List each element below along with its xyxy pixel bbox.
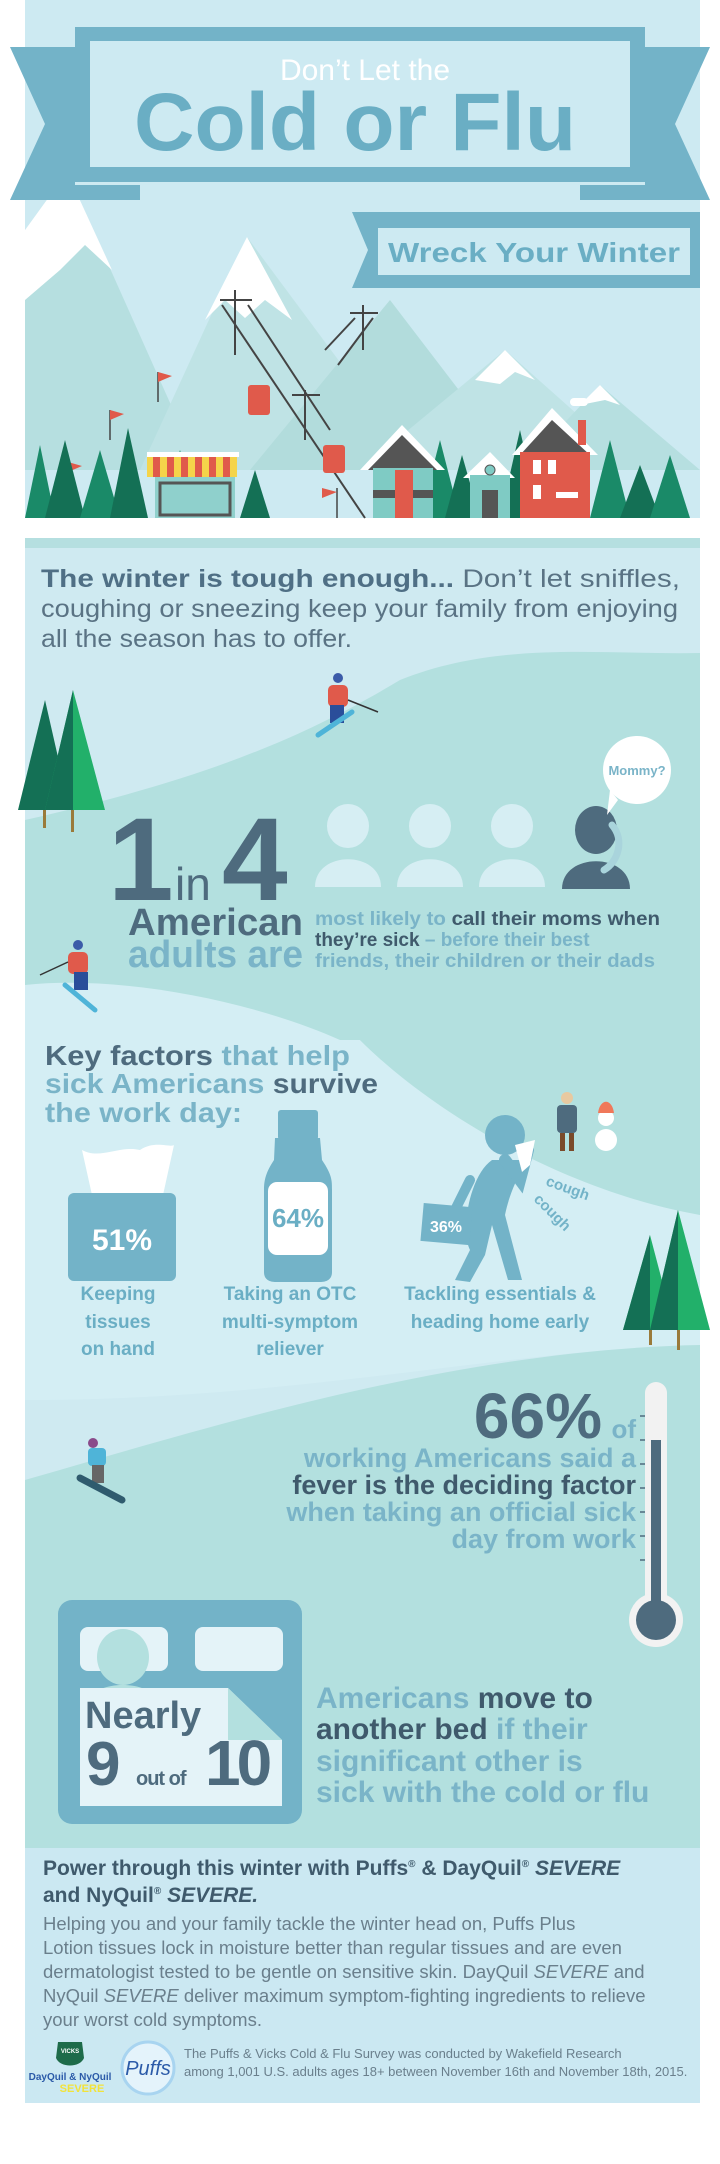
heading: Cold or Flu: Cold or Flu bbox=[134, 77, 576, 168]
icon: tissue box 51% bbox=[68, 1145, 176, 1281]
title banner bbox=[10, 27, 710, 200]
labels: key factors: reliever bbox=[256, 1339, 324, 1360]
icon: bed with 9 out of 10: Nearly bbox=[85, 1695, 201, 1737]
heading: power through: Power through this winter with Puffs bbox=[43, 1857, 408, 1880]
text: move to another bed: another bed if their bbox=[316, 1713, 588, 1746]
stat: 1 in 4 bbox=[108, 794, 303, 976]
flags bbox=[68, 372, 337, 518]
labels: key factors: Taking an OTC bbox=[224, 1284, 357, 1305]
text: moms: they’re sick – before their best bbox=[315, 930, 590, 951]
heading: power through bbox=[43, 1857, 621, 1907]
heading: power through: SEVERE. bbox=[161, 1884, 258, 1907]
icon: tissue box 51%: 51% bbox=[92, 1224, 152, 1257]
intro text bbox=[41, 565, 680, 653]
stat: 1 in 4: adults are bbox=[128, 934, 303, 976]
panel: header scene bbox=[25, 0, 700, 518]
text: footnote: among 1,001 U.S. adults ages 18+ between November 16th and November 18th, 2015. bbox=[184, 2064, 687, 2079]
logo: Vicks DayQuil NyQuil: SEVERE bbox=[60, 2083, 104, 2095]
icon: people bbox=[315, 804, 630, 889]
stat: 1 in 4: 4 bbox=[222, 794, 288, 926]
labels: key factors: on hand bbox=[81, 1339, 155, 1360]
stat: 66% fever: working Americans said a bbox=[303, 1443, 637, 1473]
icon: skier left bbox=[40, 940, 95, 1010]
intro text: coughing or sneezing keep your family from enjoying bbox=[41, 595, 678, 623]
stat: 66% fever: of bbox=[611, 1414, 636, 1444]
heading: power through: and NyQuil bbox=[43, 1884, 154, 1907]
stat: 1 in 4: in bbox=[175, 858, 211, 910]
stat: 66% fever: fever is the deciding factor bbox=[292, 1470, 636, 1500]
houses bbox=[360, 398, 598, 518]
text: moms: most likely to call their moms when bbox=[315, 909, 660, 930]
intro text: The winter is tough enough... Don’t let sniffles, bbox=[41, 565, 680, 593]
labels: key factors: heading home early bbox=[411, 1312, 590, 1333]
text: moms bbox=[315, 909, 660, 972]
icon: sick walking person 36% bbox=[420, 1115, 592, 1282]
heading: power through: ® bbox=[522, 1859, 530, 1870]
logo: Vicks DayQuil NyQuil bbox=[29, 2042, 112, 2095]
heading: key factors: the work day: bbox=[45, 1097, 242, 1128]
logo: Vicks DayQuil NyQuil: DayQuil & NyQuil bbox=[29, 2072, 112, 2083]
panel: stats section background bbox=[25, 538, 700, 1848]
heading: key factors: sick Americans survive bbox=[45, 1068, 378, 1099]
stat: 66% fever: 66% bbox=[474, 1380, 602, 1452]
heading: Don't Let the: Don’t Let the bbox=[280, 54, 450, 87]
text: body paragraph: your worst cold symptoms. bbox=[43, 2009, 262, 2030]
labels: key factors: Tackling essentials & bbox=[404, 1284, 596, 1305]
stat: 1 in 4: 1 bbox=[108, 794, 174, 926]
stat: 66% fever bbox=[285, 1380, 637, 1554]
text: footnote bbox=[184, 2046, 687, 2079]
heading: power through: SEVERE bbox=[529, 1857, 621, 1880]
labels: key factors: Keeping bbox=[81, 1284, 155, 1305]
labels: key factors bbox=[81, 1284, 596, 1360]
heading: power through: ® bbox=[154, 1886, 162, 1897]
logo: Vicks DayQuil NyQuil: VICKS bbox=[61, 2049, 79, 2055]
icon: bottle 64%: 64% bbox=[272, 1203, 324, 1233]
stat: 66% fever: day from work bbox=[451, 1524, 637, 1554]
heading: key factors: Key factors that help bbox=[45, 1040, 350, 1071]
text: body paragraph: Lotion tissues lock in moisture better than regular tissues and are even bbox=[43, 1937, 622, 1958]
callout: Mommy? bbox=[603, 736, 671, 815]
text: body paragraph: Helping you and your family tackle the winter head on, Puffs Plus bbox=[43, 1913, 575, 1934]
text: move to another bed bbox=[316, 1682, 649, 1809]
text: body paragraph bbox=[43, 1913, 646, 2030]
text: footnote: The Puffs & Vicks Cold & Flu Survey was conducted by Wakefield Research bbox=[184, 2046, 622, 2061]
text: move to another bed: significant other is bbox=[316, 1745, 583, 1778]
ski lift bbox=[220, 290, 378, 518]
intro text: all the season has to offer. bbox=[41, 625, 352, 653]
icon: trees right bbox=[623, 1210, 710, 1350]
icon: bed with 9 out of 10: 10 bbox=[205, 1727, 270, 1799]
subtitle banner: Wreck Your Winter bbox=[352, 212, 700, 288]
text: move to another bed: sick with the cold or flu bbox=[316, 1776, 649, 1809]
icon: bed with 9 out of 10: 9 bbox=[86, 1730, 120, 1799]
icon: sick walking person 36%: cough bbox=[544, 1173, 592, 1204]
icon: sick walking person 36%: 36% bbox=[430, 1219, 462, 1236]
text: body paragraph: NyQuil SEVERE deliver maximum symptom-fighting ingredients to relieve bbox=[43, 1985, 646, 2006]
text: body paragraph: dermatologist tested to be gentle on sensitive skin. DayQuil SEVERE and bbox=[43, 1961, 645, 1982]
panel: footer bbox=[25, 1848, 700, 2103]
labels: key factors: tissues bbox=[85, 1312, 151, 1333]
icon: skier top bbox=[318, 673, 378, 735]
icon: trees left bbox=[18, 690, 105, 832]
heading: key factors bbox=[45, 1040, 378, 1128]
icon: thermometer bbox=[629, 1382, 683, 1647]
icon: man and snowman bbox=[557, 1092, 617, 1151]
callout: Mommy?: Mommy? bbox=[608, 763, 666, 778]
heading: power through: ® bbox=[408, 1859, 416, 1870]
labels: key factors: multi-symptom bbox=[222, 1312, 358, 1333]
mountains bbox=[25, 172, 700, 470]
gondolas bbox=[248, 385, 345, 473]
text: moms: friends, their children or their dads bbox=[315, 951, 655, 972]
logo: Puffs: Puffs bbox=[125, 2058, 171, 2080]
icon: bed with 9 out of 10: out of bbox=[136, 1768, 187, 1790]
stat: 1 in 4: American bbox=[128, 902, 303, 944]
logo: Puffs bbox=[122, 2042, 174, 2094]
trees bbox=[25, 428, 690, 518]
text: move to another bed: Americans move to bbox=[316, 1682, 593, 1715]
subtitle banner: Wreck Your Winter: Wreck Your Winter bbox=[388, 237, 680, 268]
heading: power through: & DayQuil bbox=[416, 1857, 522, 1880]
icon: snowboarder bbox=[80, 1438, 122, 1500]
stat: 66% fever: when taking an official sick bbox=[285, 1497, 637, 1527]
icon: bottle 64% bbox=[264, 1110, 332, 1282]
shop bbox=[147, 452, 239, 518]
icon: bed with 9 out of 10 bbox=[58, 1600, 302, 1824]
icon: sick walking person 36%: cough bbox=[530, 1191, 574, 1235]
